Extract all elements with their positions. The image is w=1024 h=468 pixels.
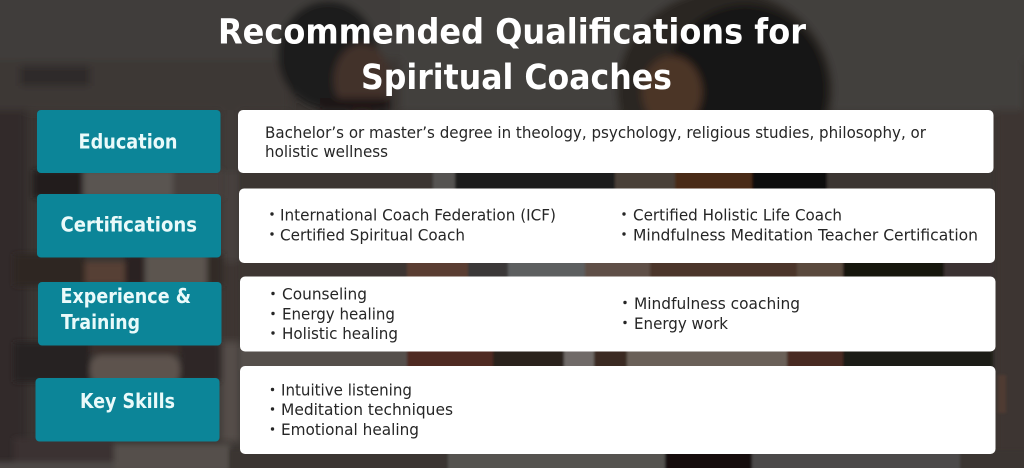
panel: experience list: Mindfulness coaching: [634, 294, 800, 313]
label: experience and training: Experience &: [60, 284, 191, 308]
panel: certifications list: Certified Holistic Life Coach: [633, 206, 842, 224]
row: certifications: [37, 188, 995, 263]
panel: certifications list: Certified Spiritual Coach: [280, 226, 465, 244]
panel: key skills list: Emotional healing: [281, 420, 419, 439]
label: certifications: [37, 194, 221, 258]
panel: education details: [238, 110, 994, 173]
gap 3: [240, 348, 407, 370]
label: experience and training: [38, 282, 222, 346]
panel: certifications list: International Coach Federation (ICF): [280, 206, 556, 224]
panel: education details: Bachelor’s or master’s degree in theology, psychology, religious studies, philosophy, or: [265, 123, 926, 142]
label: key skills: Key Skills: [80, 389, 175, 413]
panel: experience list: Counseling: [282, 284, 367, 304]
woman: [617, 0, 833, 190]
panel: certifications list: [239, 188, 995, 263]
panel: key skills list: [240, 366, 996, 454]
panel: certifications list: Mindfulness Meditation Teacher Certification: [633, 226, 978, 244]
gap 1: [240, 170, 433, 192]
panel: key skills list: Intuitive listening: [281, 380, 412, 400]
gap 2: [240, 260, 407, 280]
panel: experience list: Energy healing: [282, 304, 395, 324]
label: key skills: [36, 378, 220, 442]
label: education: [37, 110, 220, 173]
left side figures: [0, 110, 27, 468]
panel: key skills list: Meditation techniques: [281, 400, 453, 419]
title: Recommended Qualifications for: [218, 12, 806, 52]
gaps between left labels: [33, 170, 83, 198]
panel: experience list: Holistic healing: [282, 324, 398, 343]
row: key skills: [36, 366, 996, 454]
label: education: Education: [78, 130, 178, 154]
label: experience and training: Training: [61, 310, 140, 334]
row: education: [37, 110, 994, 173]
panel: experience list: [240, 276, 996, 352]
bottom strip: [230, 450, 448, 468]
label: certifications: Certifications: [60, 212, 197, 236]
panel: experience list: Energy work: [634, 314, 729, 333]
title: Spiritual Coaches: [361, 58, 672, 98]
man: [278, 1, 378, 109]
row: experience and training: [38, 276, 996, 352]
title: [218, 12, 806, 98]
panel: education details: holistic wellness: [265, 142, 388, 161]
